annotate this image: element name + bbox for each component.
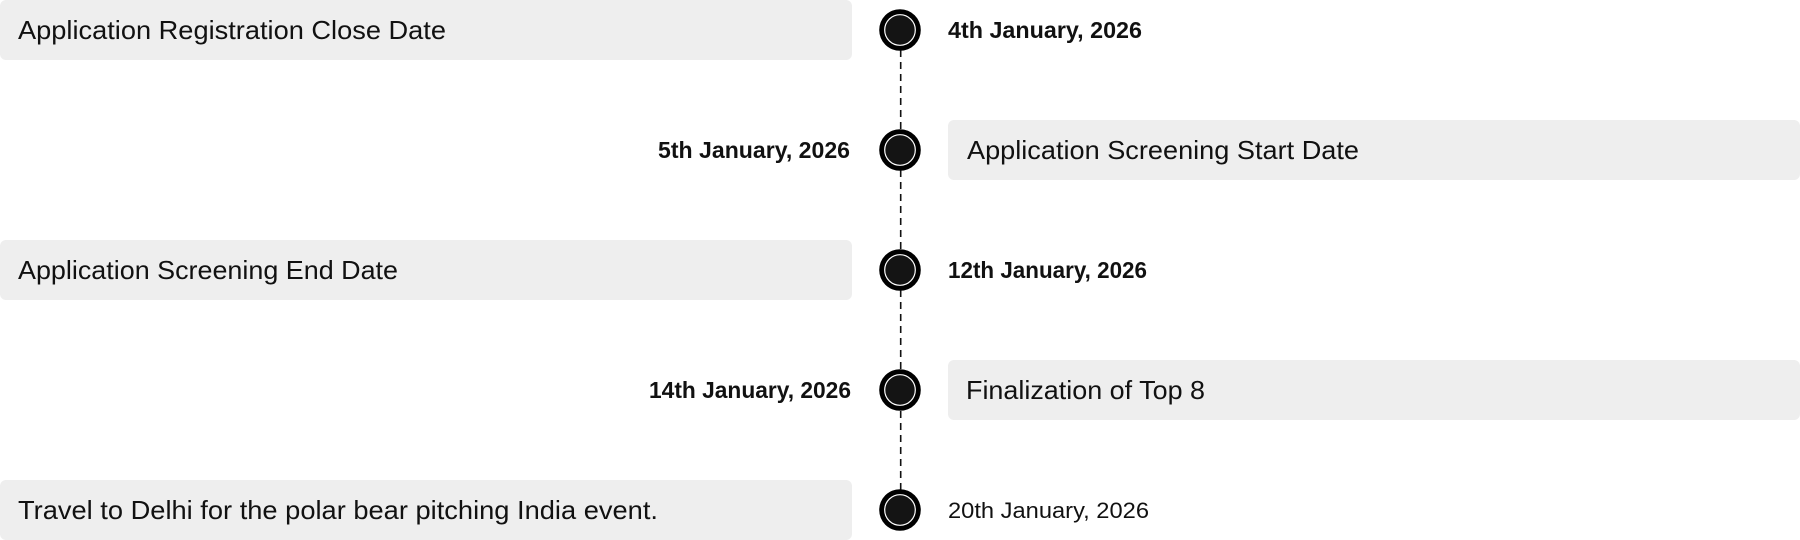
date: 14th January, 2026: 14th January, 2026 — [649, 377, 851, 403]
panel: Application Registration Close Date: Application Registration Close Date — [18, 15, 446, 45]
panel: Travel to Delhi — [0, 480, 852, 540]
row 1: registration close — [0, 0, 1142, 60]
panel: Application Screening Start Date — [948, 120, 1800, 180]
panel: Application Screening Start Date: Application Screening Start Date — [967, 135, 1359, 165]
panel: Application Registration Close Date — [0, 0, 852, 60]
icon: timeline node 3 — [879, 249, 921, 291]
row 4: finalization — [649, 360, 1800, 420]
row 2: screening start — [658, 120, 1800, 180]
date: 5th January, 2026: 5th January, 2026 — [658, 137, 850, 163]
row 3: screening end — [0, 240, 1147, 300]
icon: timeline node 2 — [879, 129, 921, 171]
date: 4th January, 2026: 4th January, 2026 — [948, 17, 1142, 43]
dashed connector line — [900, 50, 902, 490]
icon: timeline node 4 — [879, 369, 921, 411]
date: 20th January, 2026: 20th January, 2026 — [948, 498, 1149, 523]
panel: Travel to Delhi: Travel to Delhi for the polar bear pitching India event. — [18, 495, 658, 525]
panel: Application Screening End Date — [0, 240, 852, 300]
row 5: travel — [0, 480, 1149, 540]
panel: Application Screening End Date: Application Screening End Date — [18, 255, 398, 285]
panel: Finalization of Top 8 — [948, 360, 1800, 420]
date: 12th January, 2026: 12th January, 2026 — [948, 257, 1147, 283]
icon: timeline node 1 — [879, 9, 921, 51]
icon: timeline node 5 — [879, 489, 921, 531]
panel: Finalization of Top 8: Finalization of Top 8 — [966, 375, 1205, 405]
